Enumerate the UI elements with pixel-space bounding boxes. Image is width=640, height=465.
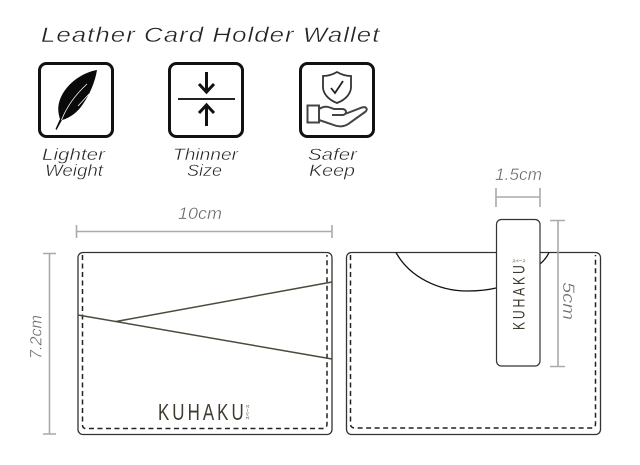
dimension: 5cm: 5cm [559, 282, 578, 320]
dimension: 5cm [550, 220, 578, 366]
dimension: 1.5cm: 1.5cm [495, 165, 542, 184]
label: Safer Keep: Keep [309, 161, 355, 180]
dimension: 10cm [76, 204, 332, 238]
icon: feather [40, 64, 112, 136]
label: Safer Keep [308, 145, 359, 180]
icon: thinner arrows [170, 64, 242, 136]
wallet front [78, 252, 332, 434]
brand logo: front: スペース [244, 404, 250, 420]
title: Leather Card Holder Wallet [41, 24, 381, 47]
strap [496, 220, 540, 366]
label: Lighter Weight [42, 145, 107, 180]
icon: shield and hand [300, 64, 374, 136]
dimension: 7.2cm [26, 254, 56, 434]
label: Thinner Size: Size [187, 161, 222, 180]
label: Thinner Size [173, 145, 240, 180]
brand logo: strap: KUHAKU [511, 265, 529, 330]
label: Safer Keep: Safer [308, 145, 359, 164]
wallet back [346, 252, 600, 434]
label: Lighter Weight: Weight [45, 161, 104, 180]
dimension: 1.5cm [495, 165, 542, 207]
label: Thinner Size: Thinner [173, 145, 240, 164]
dimension: 10cm: 10cm [178, 204, 222, 223]
brand logo: strap: スペース [512, 258, 526, 263]
dimension: 7.2cm: 7.2cm [26, 315, 46, 359]
brand logo: front: KUHAKU [158, 399, 244, 426]
label: Lighter Weight: Lighter [42, 145, 107, 164]
